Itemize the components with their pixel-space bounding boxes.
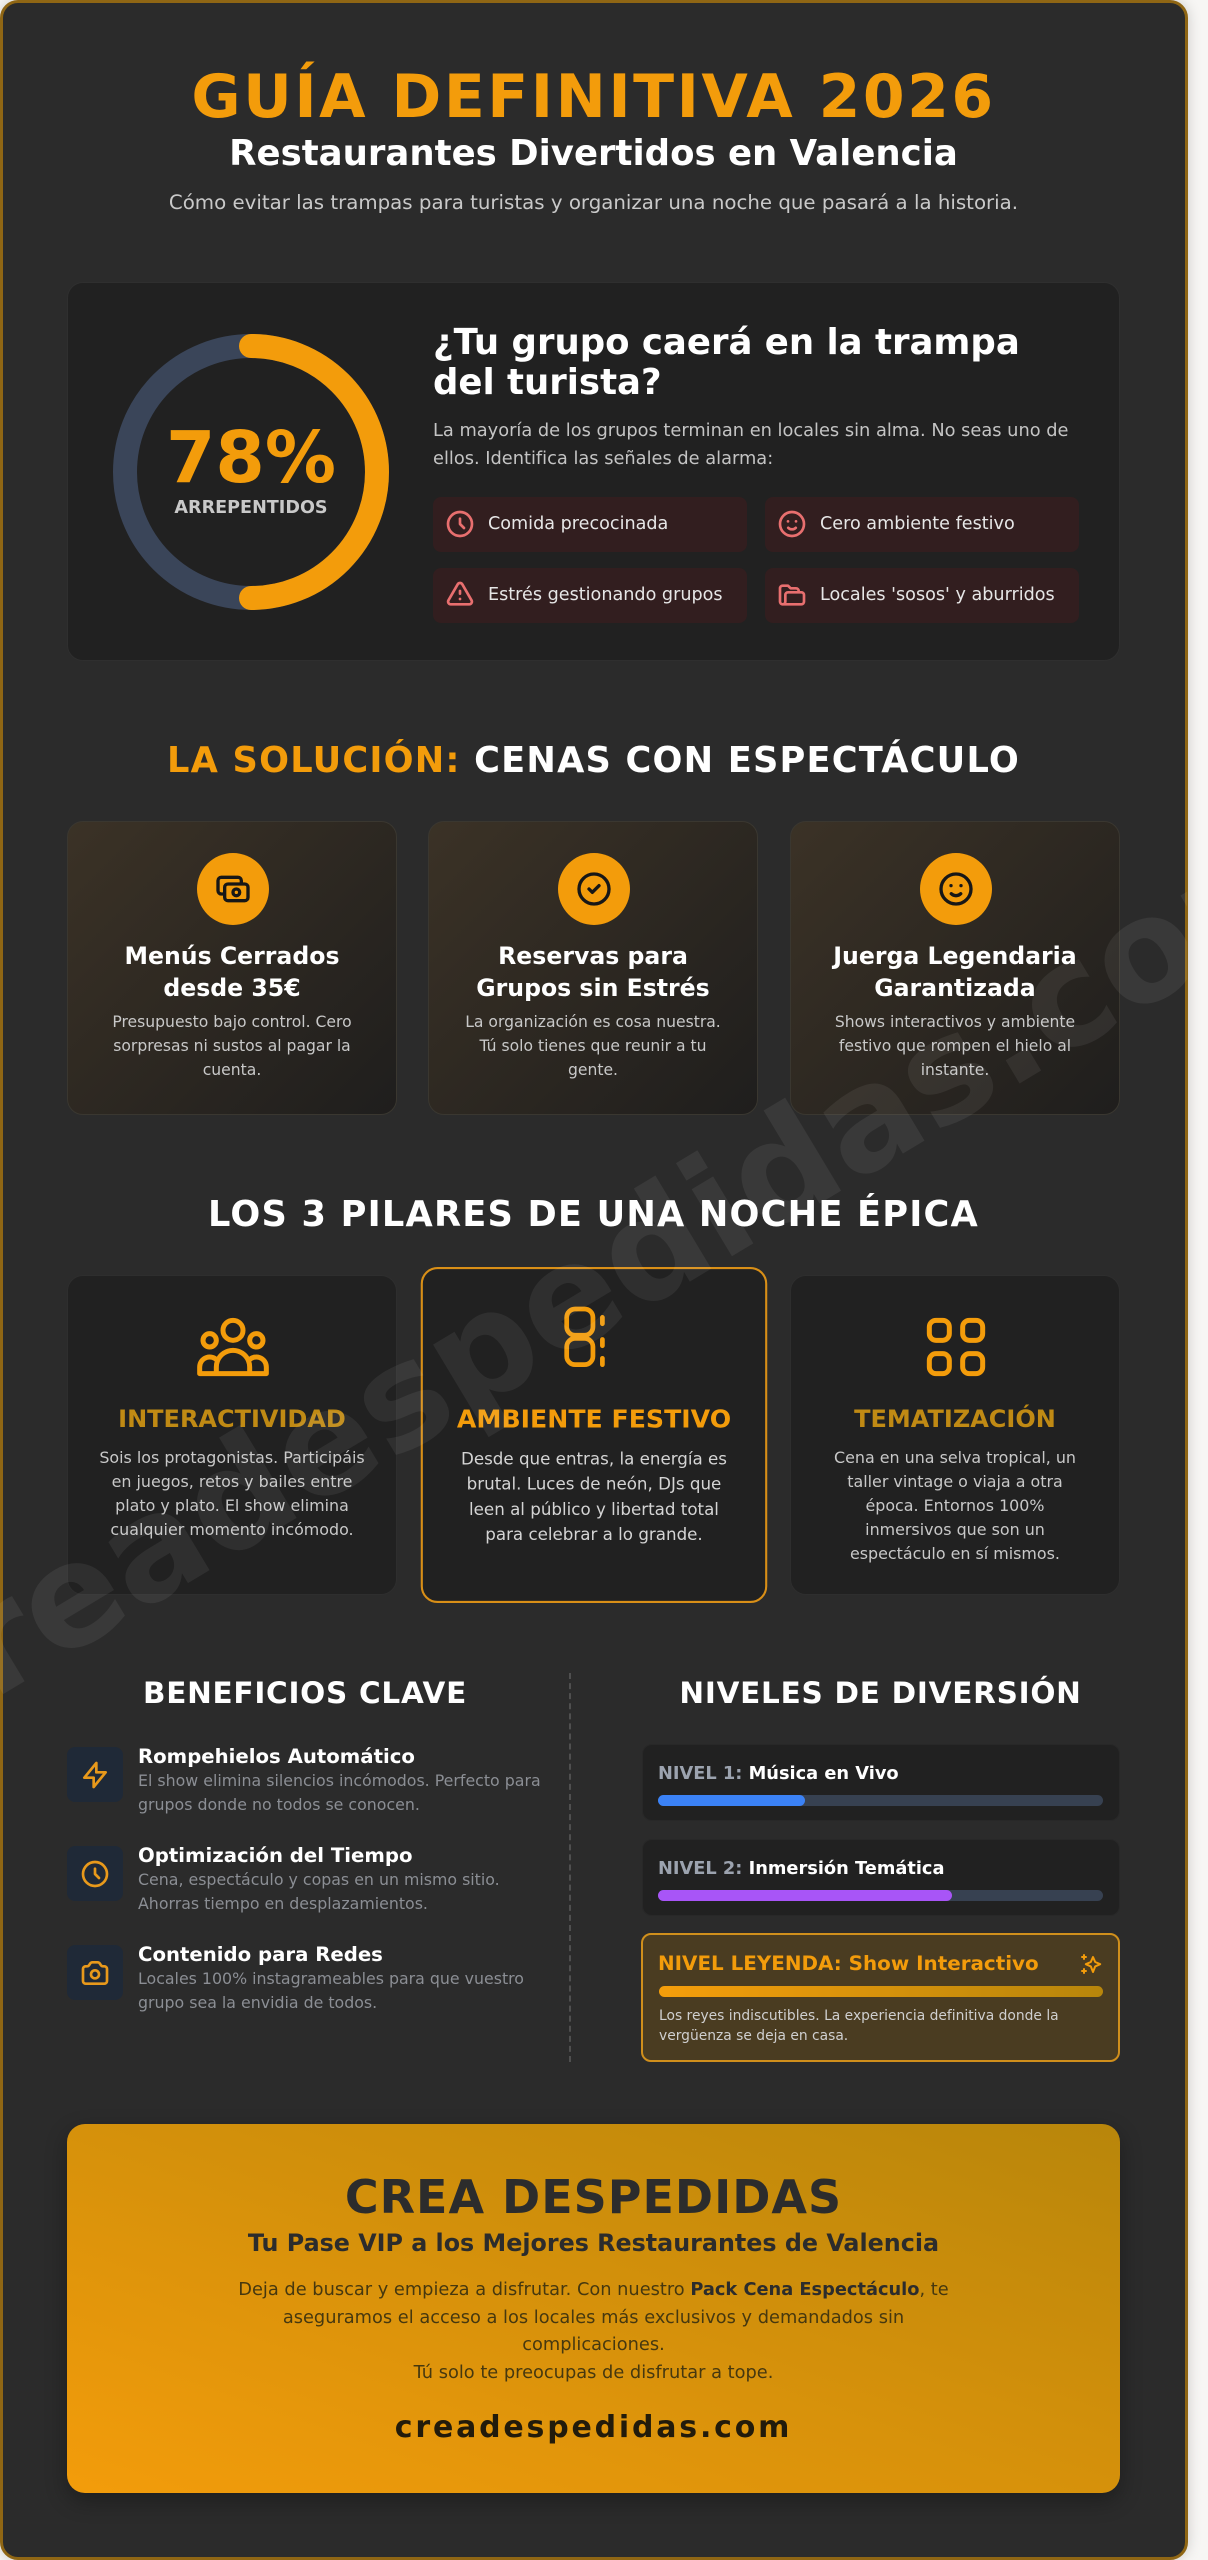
heading: beneficios: BENEFICIOS CLAVE — [143, 1676, 467, 1710]
panel: ambiente festivo — [420, 1267, 767, 1603]
trap heading: ¿Tu grupo caerá en la trampa — [433, 322, 1020, 363]
card text: gente. — [568, 1061, 618, 1079]
card text: Tú solo tienes que reunir a tu — [479, 1037, 707, 1055]
cta text: Deja de buscar y empieza a disfrutar. Con nuestro Pack Cena Espectáculo, te — [238, 2279, 949, 2300]
pillar text: época. Entornos 100% — [865, 1496, 1045, 1515]
pillar text: en juegos, retos y bailes entre — [112, 1472, 352, 1491]
pillar text: Sois los protagonistas. Participáis — [99, 1448, 365, 1467]
pillar text: brutal. Luces de neón, DJs que — [466, 1474, 721, 1494]
icon: bolt — [67, 1747, 123, 1802]
benefit title: Optimización del Tiempo — [138, 1844, 413, 1867]
card text: festivo que rompen el hielo al — [839, 1037, 1071, 1055]
sign: locales sosos — [765, 568, 1079, 623]
panel: interactividad — [67, 1275, 397, 1595]
card text: cuenta. — [203, 1061, 261, 1079]
pillar text: taller vintage o viaja a otra — [847, 1472, 1063, 1491]
card title — [124, 942, 339, 1002]
panel: tourist trap — [67, 282, 1120, 661]
level label: NIVEL 2: Inmersión Temática — [658, 1858, 944, 1879]
sign: estrés: Estrés gestionando grupos — [488, 585, 723, 605]
heading: niveles: NIVELES DE DIVERSIÓN — [679, 1676, 1082, 1710]
benefit: redes — [67, 1943, 524, 2012]
benefit title: Contenido para Redes — [138, 1943, 383, 1966]
card title — [832, 942, 1077, 1002]
level bar — [658, 1890, 1103, 1901]
card title: Garantizada — [874, 974, 1036, 1002]
icon: camera — [67, 1945, 123, 2000]
pillar text: inmersivos que son un — [865, 1520, 1045, 1539]
trap text: ellos. Identifica las señales de alarma: — [433, 448, 773, 469]
benefit text — [138, 1771, 541, 1814]
url: creadespedidas.com — [395, 2410, 792, 2445]
icon: cash — [196, 853, 268, 925]
benefit text: grupos donde no todos se conocen. — [138, 1795, 420, 1814]
trap text: La mayoría de los grupos terminan en locales sin alma. No seas uno de — [433, 420, 1068, 441]
benefit text: El show elimina silencios incómodos. Perfecto para — [138, 1771, 541, 1790]
panel: tematización — [790, 1275, 1120, 1595]
sign: locales sosos: Locales 'sosos' y aburridos — [820, 585, 1055, 605]
benefit text — [138, 1969, 524, 2012]
trap heading — [433, 322, 1020, 403]
icon: check — [558, 853, 630, 925]
donut label: ARREPENTIDOS — [174, 498, 328, 518]
level legend — [641, 1933, 1120, 2062]
card text: La organización es cosa nuestra. — [465, 1013, 721, 1031]
header — [169, 62, 1018, 214]
icon: sparkles — [1081, 1954, 1102, 1974]
trap heading: del turista? — [433, 362, 662, 403]
pillar title: AMBIENTE FESTIVO — [456, 1405, 731, 1434]
call to action panel — [67, 2124, 1120, 2493]
pillar title: TEMATIZACIÓN — [854, 1405, 1056, 1433]
card text — [112, 1013, 352, 1079]
subtitle: Restaurantes Divertidos en Valencia — [229, 133, 958, 174]
title: GUÍA DEFINITIVA 2026 — [191, 62, 996, 132]
sign: cero ambiente — [765, 497, 1079, 552]
benefit text: grupo sea la envidia de todos. — [138, 1993, 377, 2012]
icon: boards — [564, 1306, 605, 1367]
donut chart 78% — [113, 334, 389, 610]
card text: Presupuesto bajo control. Cero — [112, 1013, 352, 1031]
sign: estrés — [433, 568, 747, 623]
benefit text: Cena, espectáculo y copas en un mismo sitio. — [138, 1870, 500, 1889]
pillar text: para celebrar a lo grande. — [485, 1524, 702, 1544]
card title: Reservas para — [498, 942, 688, 970]
benefit: tiempo — [67, 1844, 500, 1913]
icon: group — [197, 1318, 269, 1376]
panel: solution 3 — [790, 821, 1120, 1115]
level 1 — [642, 1744, 1120, 1821]
card title: Grupos sin Estrés — [476, 974, 710, 1002]
intro sentence: Cómo evitar las trampas para turistas y organizar una noche que pasará a la historia. — [169, 191, 1018, 214]
card text — [835, 1013, 1075, 1079]
pillar text: cualquier momento incómodo. — [110, 1520, 354, 1539]
panel: solution 1 — [67, 821, 397, 1115]
card title: Juerga Legendaria — [833, 942, 1077, 970]
legend text — [659, 2008, 1059, 2044]
level label: NIVEL 1: Música en Vivo — [658, 1763, 899, 1784]
trap text — [433, 420, 1068, 469]
legend text: Los reyes indiscutibles. La experiencia definitiva donde la — [659, 2008, 1059, 2024]
icon: clock — [67, 1846, 123, 1901]
cta text: Tú solo te preocupas de disfrutar a tope. — [414, 2362, 773, 2383]
benefit text: Ahorras tiempo en desplazamientos. — [138, 1894, 428, 1913]
pillar title: INTERACTIVIDAD — [118, 1405, 346, 1433]
legend text: vergüenza se deja en casa. — [659, 2028, 848, 2044]
benefit: rompehielos — [67, 1745, 541, 1814]
pillar text — [834, 1448, 1076, 1563]
benefit text: Locales 100% instagrameables para que vuestro — [138, 1969, 524, 1988]
cta text — [238, 2279, 949, 2383]
pillar text: espectáculo en sí mismos. — [850, 1544, 1060, 1563]
card text: instante. — [921, 1061, 989, 1079]
legend bar — [659, 1986, 1103, 1997]
card text: Shows interactivos y ambiente — [835, 1013, 1075, 1031]
icon: grid — [926, 1318, 986, 1376]
heading: pilares: LOS 3 PILARES DE UNA NOCHE ÉPICA — [208, 1194, 979, 1235]
card text — [465, 1013, 721, 1079]
legend label: NIVEL LEYENDA: Show Interactivo — [658, 1952, 1039, 1975]
pillar text: Cena en una selva tropical, un — [834, 1448, 1076, 1467]
donut value: 78% — [166, 416, 336, 499]
level bar — [658, 1795, 1103, 1806]
card title: desde 35€ — [163, 974, 301, 1002]
card title: Menús Cerrados — [124, 942, 339, 970]
sign: comida precocinada: Comida precocinada — [488, 514, 668, 534]
pillar text: Desde que entras, la energía es — [460, 1449, 727, 1469]
sign: comida precocinada — [433, 497, 747, 552]
pillar text: leen al público y libertad total — [469, 1499, 718, 1519]
cta text: aseguramos el acceso a los locales más exclusivos y demandados sin — [283, 2307, 904, 2328]
heading: la solución: LA SOLUCIÓN: CENAS CON ESPECTÁCULO — [167, 740, 1020, 781]
cta text: complicaciones. — [522, 2334, 665, 2355]
card text: sorpresas ni sustos al pagar la — [113, 1037, 351, 1055]
pillar text — [99, 1448, 365, 1539]
cta subtitle: Tu Pase VIP a los Mejores Restaurantes de Valencia — [248, 2229, 939, 2257]
benefit text — [138, 1870, 500, 1913]
pillar text: plato y plato. El show elimina — [115, 1496, 349, 1515]
level 2 — [642, 1839, 1120, 1916]
benefit title: Rompehielos Automático — [138, 1745, 415, 1768]
pillar text — [460, 1449, 727, 1544]
sign: cero ambiente: Cero ambiente festivo — [820, 514, 1015, 534]
card title — [476, 942, 710, 1002]
alarm signs — [433, 497, 1079, 623]
brand: CREA DESPEDIDAS — [345, 2170, 842, 2224]
icon: smile — [920, 853, 992, 925]
panel: solution 2 — [428, 821, 758, 1115]
